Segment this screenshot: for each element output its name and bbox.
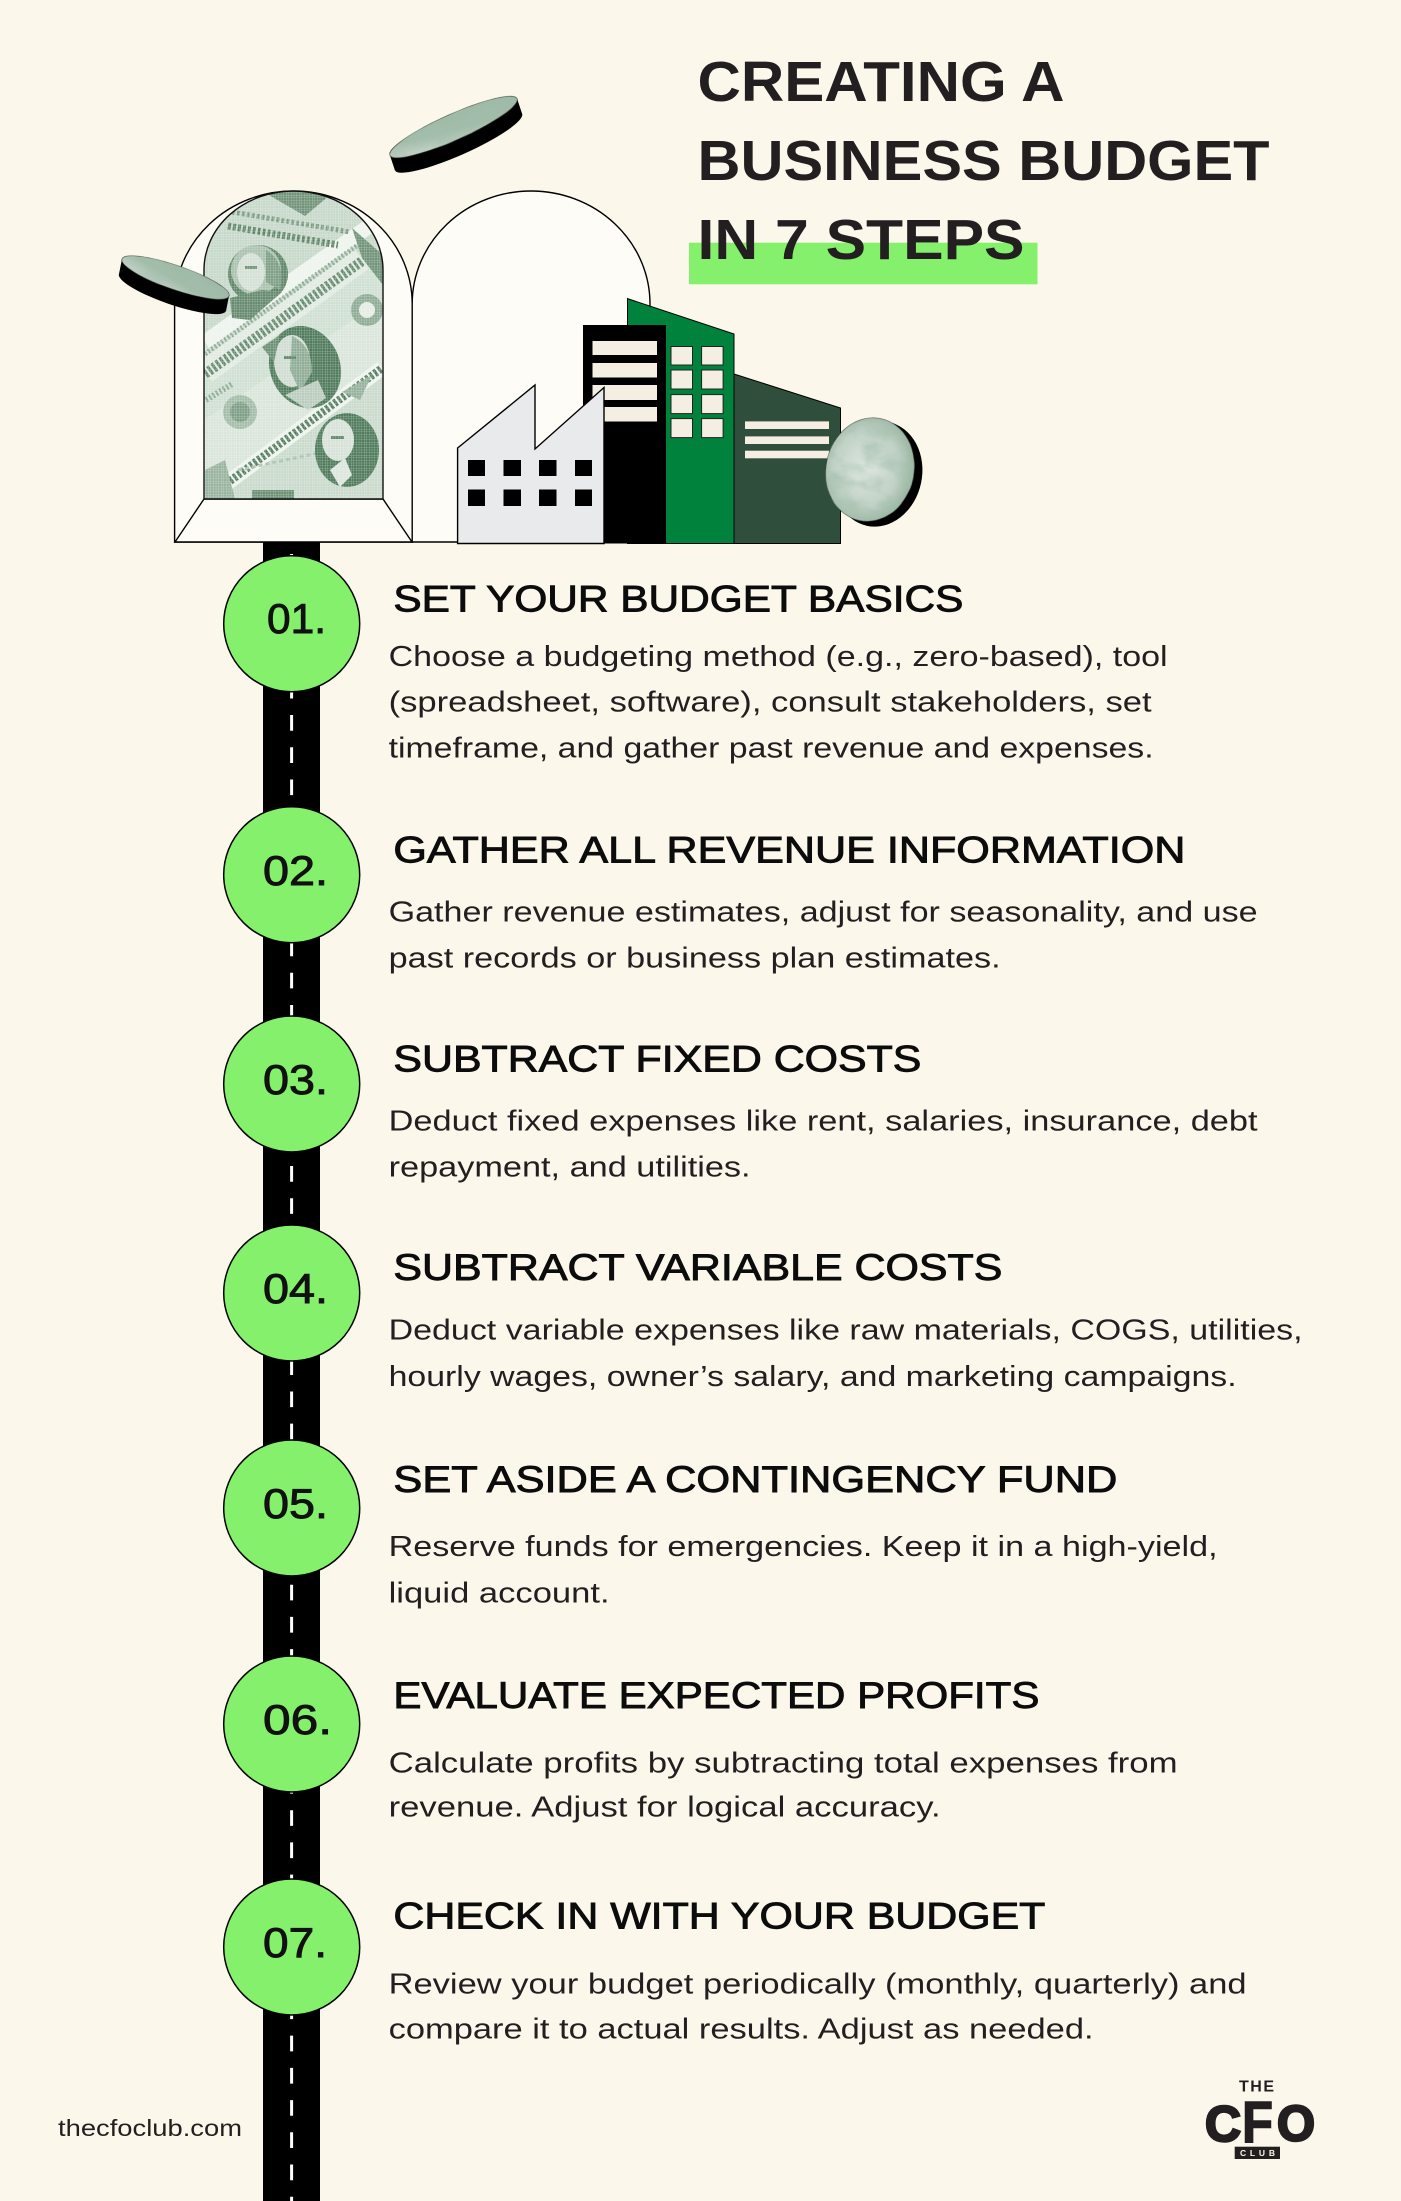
body [389, 1531, 1218, 1610]
illustration: arches, money, buildings and coins [115, 87, 932, 543]
title highlight [689, 243, 1038, 284]
heading: SUBTRACT VARIABLE COSTS [393, 1247, 1002, 1288]
badge 04: 04. [263, 1265, 328, 1312]
step 1 [224, 556, 1168, 765]
road with dashed centre line [263, 542, 320, 2201]
heading: SET YOUR BUDGET BASICS [393, 579, 963, 620]
heading: EVALUATE EXPECTED PROFITS [393, 1675, 1039, 1716]
title [689, 50, 1270, 284]
logo: The CFO Club: THE [1239, 2079, 1274, 2096]
body [389, 1315, 1303, 1393]
body: liquid account. [389, 1578, 610, 1610]
coin left [115, 248, 233, 322]
step 6 [224, 1656, 1178, 1824]
title text [698, 50, 1270, 271]
heading: SET ASIDE A CONTINGENCY FUND [393, 1459, 1117, 1500]
badge 05: 05. [263, 1480, 328, 1527]
badge 02 [224, 807, 360, 943]
badge 04 [224, 1225, 360, 1361]
body: Choose a budgeting method (e.g., zero-based), tool [389, 641, 1168, 673]
body: repayment, and utilities. [389, 1152, 751, 1184]
step 7 [224, 1879, 1247, 2046]
dark green building [734, 374, 840, 544]
step 3 [224, 1016, 1258, 1184]
badge 07 [224, 1879, 360, 2015]
factory [458, 385, 604, 544]
website url: thecfoclub.com [58, 2115, 242, 2141]
body: revenue. Adjust for logical accuracy. [389, 1792, 941, 1824]
body: timeframe, and gather past revenue and expenses. [389, 733, 1154, 765]
body: Deduct variable expenses like raw materials, COGS, utilities, [389, 1315, 1303, 1347]
second arch [412, 191, 650, 542]
black tower [583, 325, 666, 544]
badge 05 [224, 1440, 360, 1576]
body: Deduct fixed expenses like rent, salaries, insurance, debt [389, 1106, 1258, 1138]
badge 06 [224, 1656, 360, 1792]
body: past records or business plan estimates. [389, 942, 1001, 974]
body [389, 641, 1168, 765]
body [389, 1106, 1258, 1184]
badge 02: 02. [263, 847, 328, 894]
badge 03 [224, 1016, 360, 1152]
logo: The CFO Club: O [1277, 2096, 1315, 2152]
portrait lower right [315, 413, 379, 487]
logo: The CFO Club: F [1242, 2091, 1273, 2156]
title text: CREATING A [698, 50, 1064, 113]
step 2 [224, 807, 1258, 974]
heading: SUBTRACT FIXED COSTS [393, 1038, 921, 1080]
heading: CHECK IN WITH YOUR BUDGET [393, 1895, 1045, 1936]
logo: The CFO Club: CLUB [1240, 2148, 1275, 2158]
title text: BUSINESS BUDGET [698, 129, 1270, 192]
treasury seals [205, 294, 383, 499]
body: Calculate profits by subtracting total expenses from [389, 1747, 1178, 1779]
logo: The CFO Club [1205, 2079, 1315, 2159]
badge 03: 03. [263, 1056, 328, 1103]
body [389, 897, 1258, 974]
arch with floor [175, 191, 412, 542]
badge 01: 01. [267, 595, 326, 642]
green tower [628, 299, 734, 544]
badge 06: 06. [263, 1696, 332, 1743]
portrait top left [228, 245, 288, 320]
badge 01 [224, 556, 360, 692]
logo: The CFO Club: C [1205, 2096, 1241, 2152]
body [389, 1747, 1178, 1824]
body: (spreadsheet, software), consult stakeholders, set [389, 687, 1152, 719]
dollar bills window [204, 188, 383, 500]
body [389, 1968, 1247, 2046]
body: Reserve funds for emergencies. Keep it in a high-yield, [389, 1531, 1218, 1563]
step 4 [224, 1225, 1303, 1393]
coin top [385, 87, 527, 182]
badge 07: 07. [263, 1919, 327, 1966]
title text: IN 7 STEPS [698, 208, 1024, 271]
heading: GATHER ALL REVENUE INFORMATION [393, 829, 1185, 870]
step 5 [224, 1440, 1218, 1610]
body: Gather revenue estimates, adjust for seasonality, and use [389, 897, 1258, 929]
portrait middle [268, 326, 342, 410]
coin right [816, 409, 932, 535]
body: hourly wages, owner’s salary, and marketing campaigns. [389, 1361, 1237, 1393]
body: Review your budget periodically (monthly, quarterly) and [389, 1968, 1247, 2000]
body: compare it to actual results. Adjust as needed. [389, 2014, 1094, 2046]
